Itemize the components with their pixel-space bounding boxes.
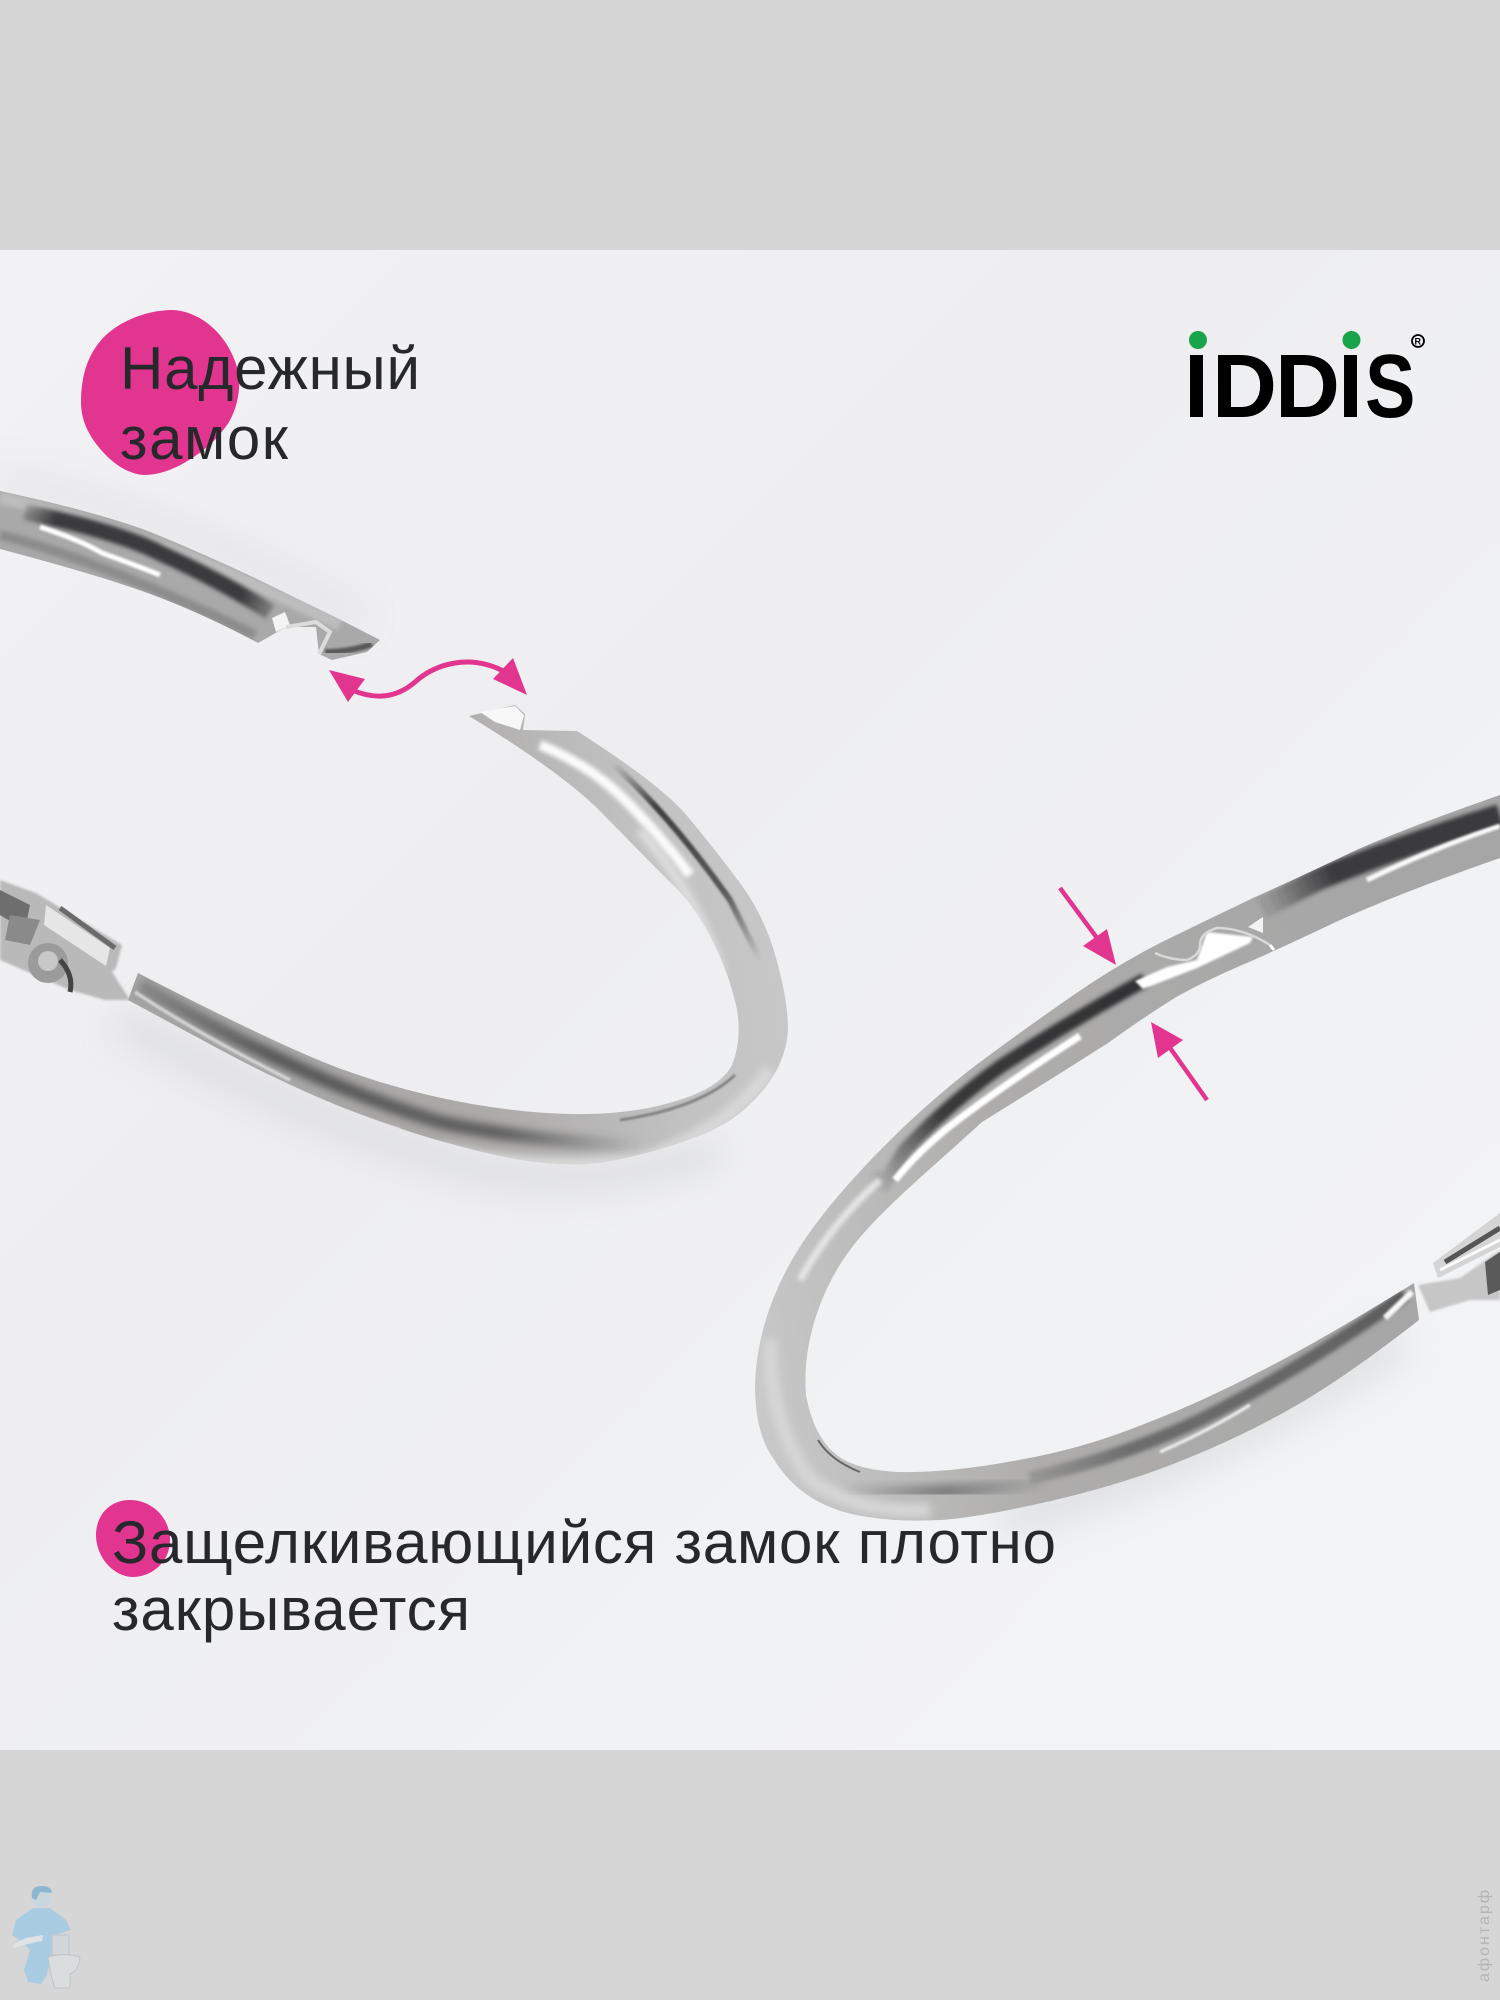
ring left: lower curved section — [128, 705, 788, 1164]
lock seam and highlight — [1135, 917, 1274, 989]
IDDIS logo: S — [1365, 336, 1415, 436]
main light panel — [0, 250, 1500, 1750]
ring left: hinge — [0, 880, 130, 1000]
watermark vertical text: афонтарф — [1476, 1890, 1493, 1982]
ring right: closed with lock — [755, 795, 1500, 1521]
double-headed wavy arrow — [329, 658, 527, 702]
heading with pink blob — [81, 310, 420, 475]
IDDIS logo: R — [1414, 336, 1422, 346]
arrow: upper pointing at lock — [1060, 888, 1116, 965]
watermark icon: plumber with toilet — [12, 1886, 80, 1988]
IDDIS logo: IDDI — [1184, 337, 1363, 437]
ring right: hinge — [1418, 1213, 1500, 1312]
caption with pink blob — [96, 1500, 1056, 1643]
heading with pink blob: замок — [120, 405, 289, 472]
caption with pink blob: закрывается — [112, 1576, 470, 1643]
caption with pink blob: Защелкивающийся замок плотно — [112, 1509, 1056, 1576]
ring left: upper open end with lock notch — [0, 491, 380, 660]
arrow: lower pointing at lock — [1151, 1022, 1207, 1100]
heading with pink blob: Надежный — [120, 335, 420, 402]
soft shadows under rings — [0, 480, 1400, 1520]
